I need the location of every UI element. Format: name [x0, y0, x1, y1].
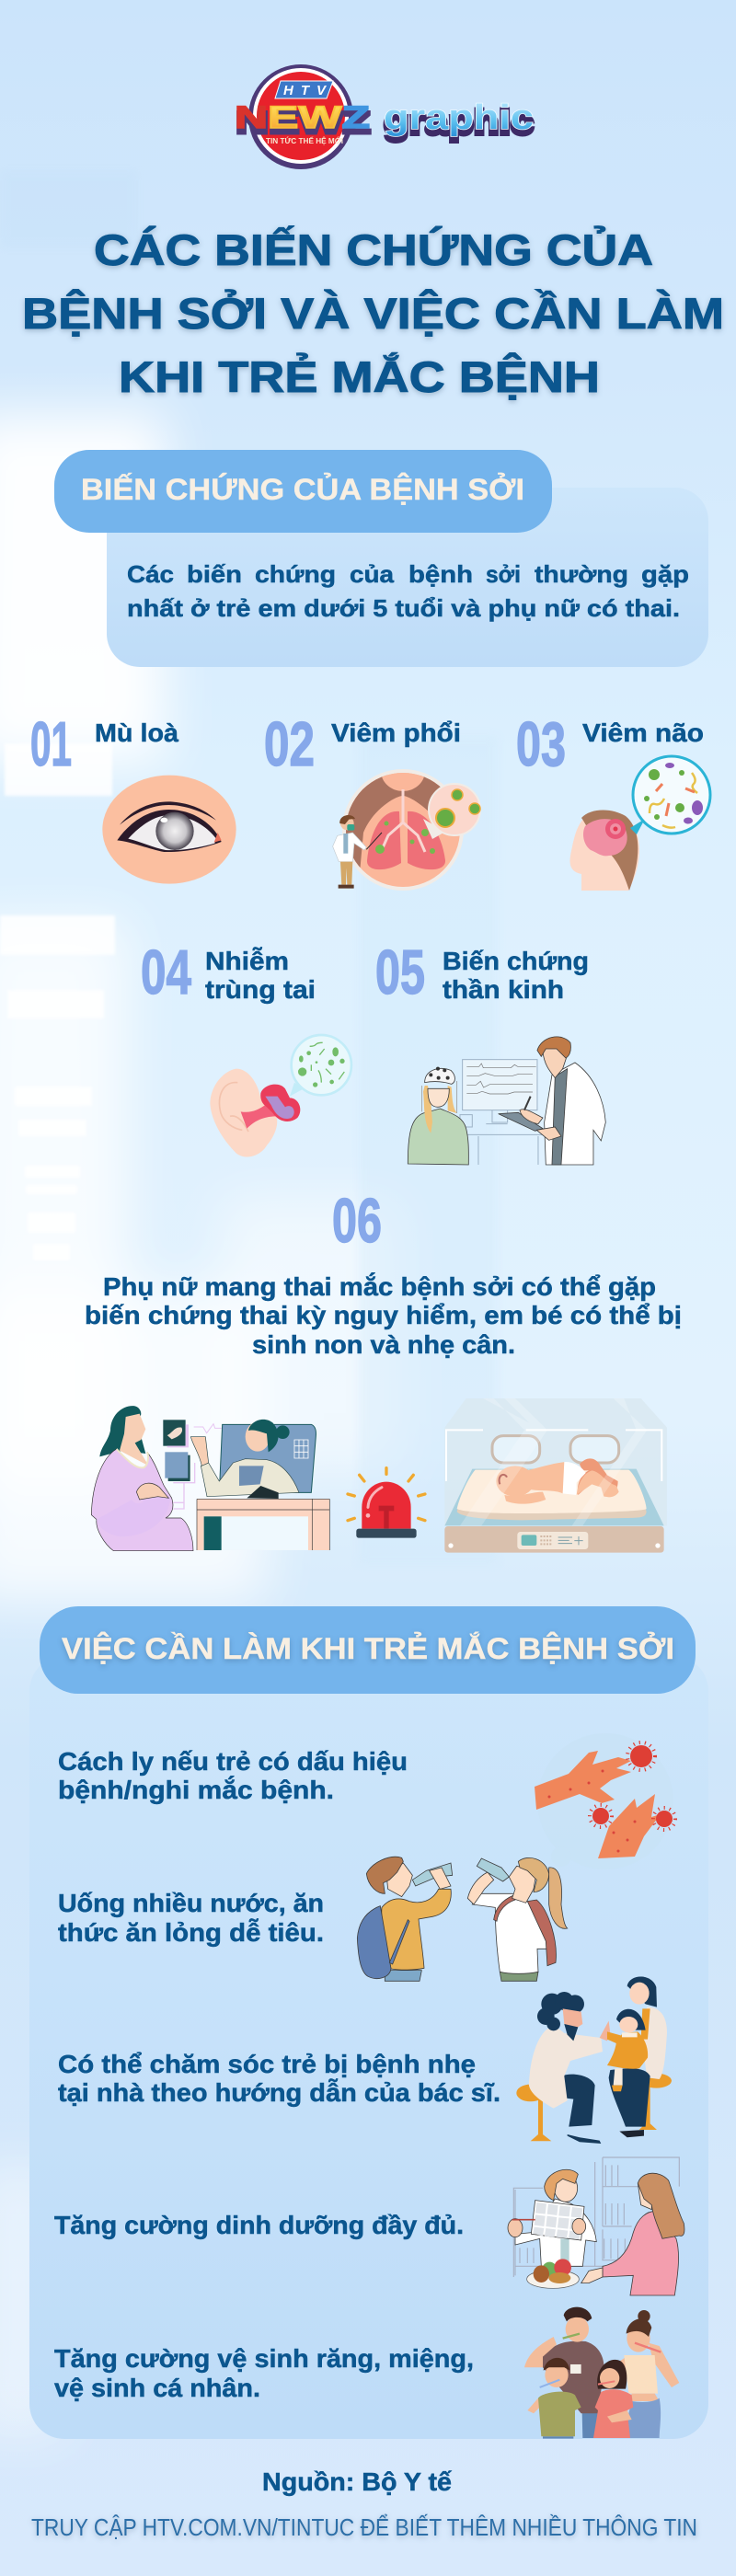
label: Viêm phổi [331, 719, 461, 747]
tip 2: drink water [58, 1857, 568, 1981]
child [607, 2009, 648, 2091]
tip text [54, 2344, 474, 2402]
doctor [499, 1037, 605, 1165]
intro text: của [350, 560, 395, 588]
number 03: 03 [516, 709, 566, 779]
title: KHI TRẺ MẮC BỆNH [119, 352, 600, 401]
tip text: Cách ly nếu trẻ có dấu hiệu [58, 1747, 408, 1776]
tip 1: isolate [58, 1733, 675, 1869]
number 05: 05 [375, 937, 425, 1007]
tip 3: home care [58, 1977, 672, 2144]
label: thần kinh [443, 975, 564, 1004]
label: Nhiễm [205, 947, 289, 975]
screen with doctor [190, 1420, 316, 1499]
hood [444, 1398, 667, 1525]
mother [609, 1977, 667, 2137]
illustration: pregnant woman and doctor [91, 1406, 329, 1551]
logo: HTV Newz graphic [235, 64, 534, 169]
title [22, 225, 724, 401]
control panel [517, 1532, 588, 1549]
description text [85, 1272, 682, 1359]
panel: complications intro [54, 450, 708, 667]
label: Mù loà [95, 719, 178, 747]
tip 4: nutrition [54, 2157, 684, 2295]
mother [619, 2310, 679, 2438]
item 06: pregnancy complications [85, 1186, 682, 1553]
monitor [460, 1060, 546, 1165]
intro text: Các [127, 560, 174, 588]
heart line [194, 1424, 222, 1433]
HTV mark [275, 81, 333, 98]
baby [496, 1458, 619, 1504]
intro text: gặp [641, 560, 689, 588]
panel background [107, 488, 708, 667]
father [524, 2307, 604, 2438]
label: Viêm não [582, 719, 704, 747]
intro text: chứng [255, 560, 336, 588]
icon: head with brain and germs [570, 756, 710, 891]
doctor [529, 1992, 610, 2144]
fruit plate [527, 2259, 579, 2288]
item 01: blindness [30, 709, 236, 884]
boy [357, 1857, 453, 1981]
item 03: encephalitis [516, 709, 710, 891]
icon: family brushing teeth [524, 2307, 679, 2439]
section heading pill [54, 450, 552, 533]
icon: eye with cataract [102, 776, 236, 884]
label: Biến chứng [443, 947, 589, 975]
tip text: thức ăn lỏng dễ tiêu. [58, 1918, 324, 1947]
hood frame [446, 1430, 661, 1481]
daughter [593, 2360, 633, 2438]
tip text [58, 1747, 408, 1804]
ultrasound cards [163, 1420, 195, 1509]
logo badge shadow [248, 64, 353, 169]
label: trùng tai [205, 975, 316, 1004]
woman in pink [581, 2173, 684, 2295]
stools [516, 2074, 672, 2141]
incubator base [444, 1526, 664, 1553]
tip text [58, 1889, 324, 1947]
panel: what to do [29, 1606, 708, 2439]
intro text: bệnh [408, 560, 473, 588]
graphic wordmark: graphic [384, 104, 534, 143]
NEWZ wordmark: NEWZ [236, 106, 371, 141]
mattress [457, 1470, 647, 1520]
tip text: Tăng cường dinh dưỡng đầy đủ. [54, 2211, 464, 2239]
description text: sinh non và nhẹ cân. [252, 1330, 515, 1359]
item 04: ear infection [141, 937, 351, 1156]
icon: ear [210, 1035, 351, 1156]
NEWZ wordmark: N EW Z [235, 100, 370, 135]
port holes [492, 1436, 619, 1463]
pregnant woman [91, 1406, 193, 1551]
description text: biến chứng thai kỳ nguy hiểm, em bé có thể bị [85, 1301, 682, 1329]
icon: lungs with virus [332, 769, 481, 891]
panel background [29, 1656, 708, 2439]
icon: EEG test with doctor [408, 1037, 605, 1165]
icon: nutritionist and woman [508, 2157, 684, 2295]
intro text: thường [535, 560, 628, 588]
tip text [58, 2050, 500, 2107]
son [527, 2358, 581, 2439]
intro text: biến [187, 560, 242, 588]
section heading pill: VIỆC CẦN LÀM KHI TRẺ MẮC BỆNH SỞI [62, 1632, 674, 1665]
intro text: sởi [486, 560, 521, 588]
icon: hands with rash [535, 1733, 675, 1869]
graphic wordmark: graphic [384, 98, 534, 137]
mattress base [444, 1469, 664, 1525]
icon: two kids drinking water [357, 1857, 568, 1981]
tip text: Có thể chăm sóc trẻ bị bệnh nhẹ [58, 2050, 476, 2078]
icon: red alarm [348, 1468, 425, 1538]
item 05: neurological complications [375, 937, 605, 1165]
tip text: Tăng cường vệ sinh răng, miệng, [54, 2344, 474, 2373]
panel: complications intro: nhất ở trẻ em dưới 5 tuổi và phụ nữ có thai. [127, 594, 680, 622]
virus bubble [423, 784, 480, 839]
desk [197, 1499, 329, 1550]
tip 5: hygiene [54, 2307, 679, 2439]
shelves [513, 2157, 679, 2277]
patient [408, 1067, 468, 1165]
tip text: vệ sinh cá nhân. [54, 2374, 260, 2402]
description text: Phụ nữ mang thai mắc bệnh sởi có thể gặp [103, 1272, 656, 1301]
doctor with pointer [333, 815, 382, 889]
icon: doctor with mother and child [516, 1977, 672, 2144]
girl [467, 1857, 568, 1981]
nutritionist [508, 2169, 596, 2266]
tip text: bệnh/nghi mắc bệnh. [58, 1776, 334, 1804]
number 06: 06 [332, 1186, 382, 1256]
section heading pill: BIẾN CHỨNG CỦA BỆNH SỞI [81, 473, 524, 506]
HTV mark: HTV [283, 83, 328, 98]
number 04: 04 [141, 937, 191, 1007]
logo badge [255, 70, 347, 162]
tip text: Uống nhiều nước, ăn [58, 1889, 324, 1917]
number 02: 02 [264, 709, 315, 779]
section heading pill [40, 1606, 696, 1694]
tip text: tại nhà theo hướng dẫn của bác sĩ. [58, 2078, 500, 2107]
source: Nguồn: Bộ Y tế [262, 2467, 452, 2496]
glass reflections [460, 1398, 647, 1525]
logo tagline: TIN TỨC THẾ HỆ MỚI [266, 135, 343, 145]
item 02: pneumonia [29, 709, 710, 2541]
number 01: 01 [30, 709, 72, 779]
illustration: baby in incubator [444, 1398, 667, 1553]
title: BỆNH SỞI VÀ VIỆC CẦN LÀM [22, 289, 724, 338]
title: CÁC BIẾN CHỨNG CỦA [94, 225, 653, 274]
